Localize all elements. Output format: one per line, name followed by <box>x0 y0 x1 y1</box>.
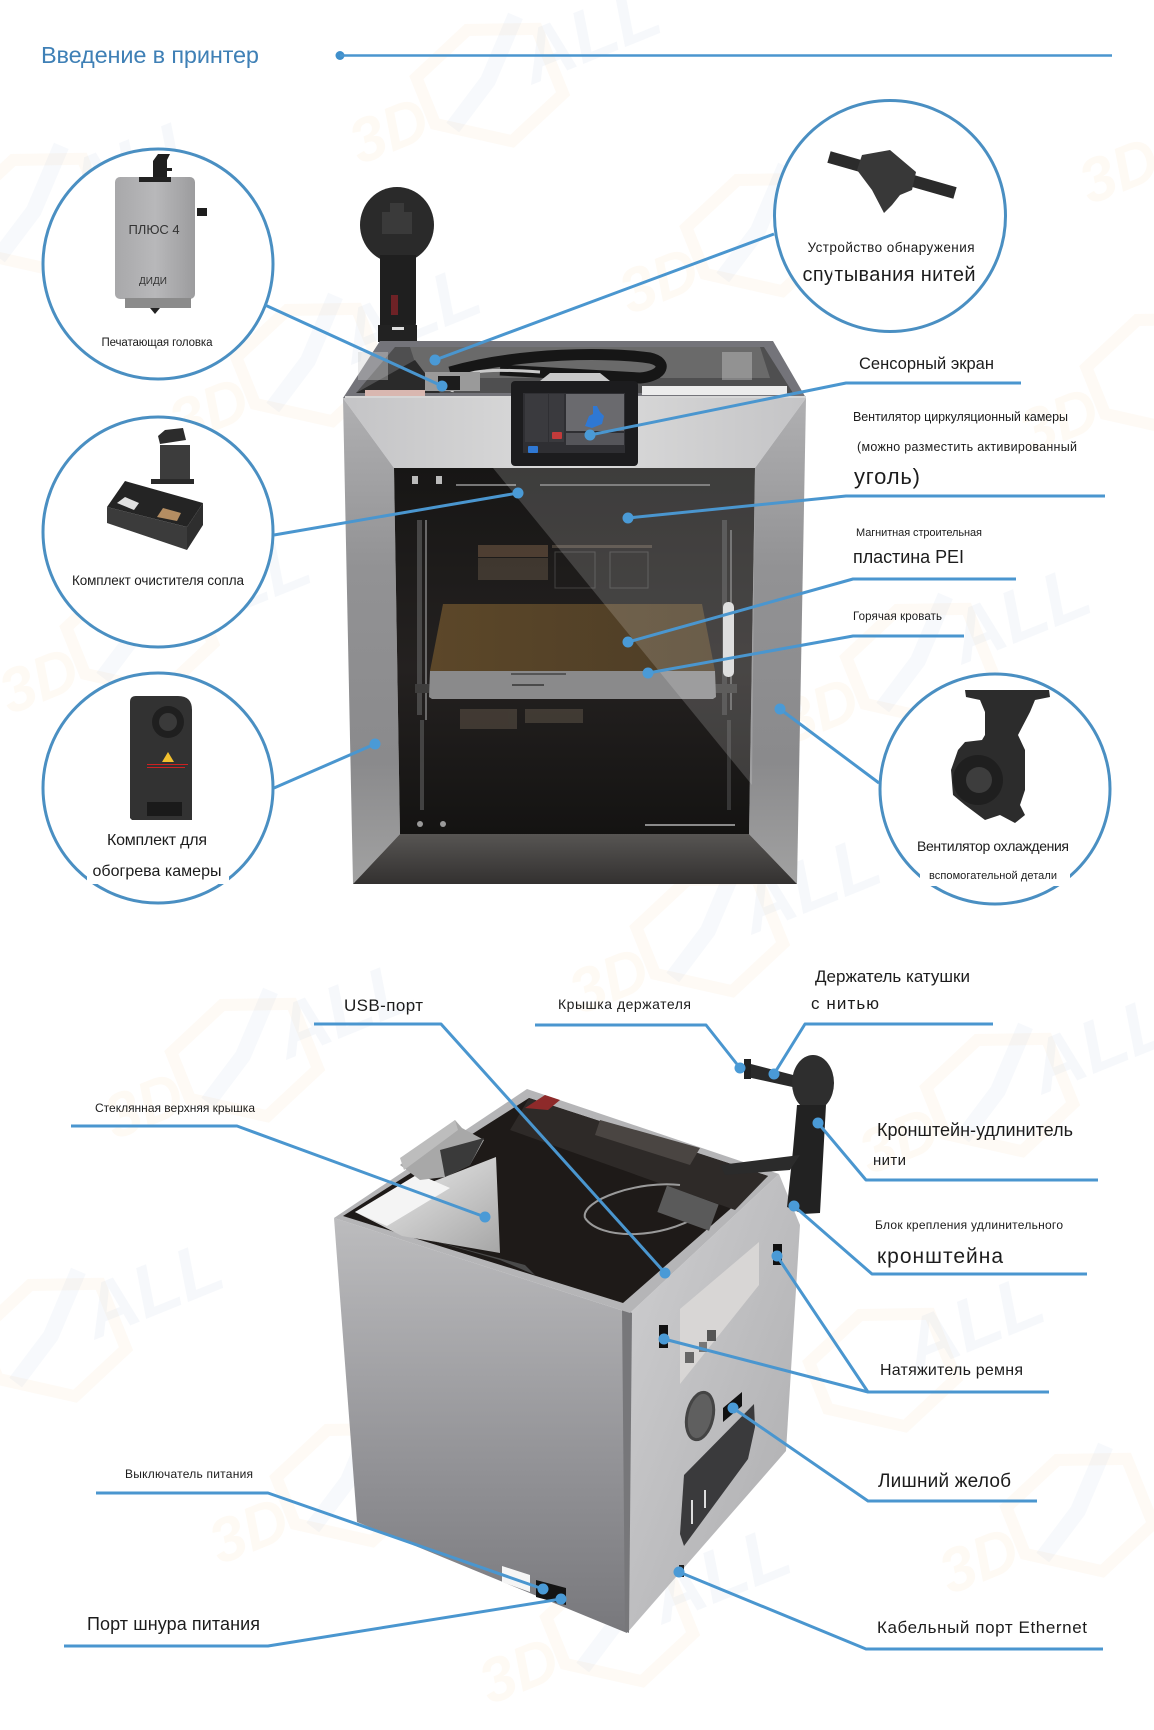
callout lines: front view <box>265 234 1105 788</box>
watermark background: ALL <box>51 99 218 230</box>
label: extra chute: Лишний желоб <box>878 1471 1011 1492</box>
labels: front view right column <box>853 355 1077 623</box>
callout lines: rear view <box>64 1024 1103 1649</box>
label: printhead: Печатающая головка <box>102 337 213 349</box>
icon: blower fan <box>951 690 1050 823</box>
label: spool holder: Держатель катушки <box>815 967 970 986</box>
watermark background: ALL <box>889 1257 1055 1389</box>
watermark background: ALL <box>68 1224 235 1355</box>
top opening <box>343 1095 768 1303</box>
label: blower fan: вспомогательной детали <box>929 870 1057 882</box>
label: chamber heater: Комплект для <box>107 832 207 849</box>
watermark background: 3D <box>849 1094 949 1188</box>
label: chamber heater: обогрева камеры <box>92 863 222 880</box>
label: circulation fan: уголь) <box>854 464 920 489</box>
circle: nozzle wiper kit <box>43 417 273 647</box>
icon: nozzle wiper <box>107 428 203 550</box>
label: bracket mount block: кронштейна <box>877 1245 1003 1268</box>
label: chamber heater <box>87 832 229 884</box>
label: spool holder <box>811 967 970 1013</box>
label: belt tensioner: Натяжитель ремня <box>880 1362 1023 1379</box>
printer top interior <box>343 341 806 398</box>
label: bracket mount block <box>875 1218 1063 1268</box>
label: tangle detector: Устройство обнаружения <box>808 240 974 255</box>
label: magnetic PEI plate: Магнитная строительная <box>856 527 982 539</box>
frame bevels <box>343 398 806 884</box>
icon: chamber heater <box>130 696 192 820</box>
label: filament extension bracket <box>873 1120 1073 1169</box>
label: holder cover: Крышка держателя <box>558 996 691 1012</box>
front corner edge <box>622 1308 632 1633</box>
watermark background: 3D <box>559 934 659 1028</box>
panel: front view printer <box>343 187 806 884</box>
label: magnetic PEI plate: пластина PEI <box>853 547 964 567</box>
labels: rear view <box>87 967 1087 1637</box>
icon: printhead: ПЛЮС 4 <box>128 222 180 237</box>
label: filament extension bracket: Кронштейн-удлинитель <box>877 1120 1073 1140</box>
chamber window <box>394 468 755 834</box>
heated bed <box>429 604 716 699</box>
watermark background: ALL <box>260 944 427 1075</box>
watermark background: 3D <box>1009 374 1109 468</box>
watermark background: 3D <box>609 234 709 328</box>
circle: auxiliary part cooling fan <box>880 674 1110 904</box>
icon: printhead <box>115 154 207 314</box>
label: blower fan <box>917 838 1070 886</box>
watermark background: 3D <box>199 1484 299 1578</box>
label: ethernet port: Кабельный порт Ethernet <box>877 1618 1087 1637</box>
rear spool holder <box>720 1055 834 1214</box>
panel: rear view printer <box>334 1055 834 1633</box>
label: bracket mount block: Блок крепления удлинительного <box>875 1218 1063 1232</box>
rear right face <box>627 1174 800 1633</box>
circle: chamber heater <box>43 673 273 903</box>
circle: printhead <box>43 149 273 379</box>
label: circulation fan: Вентилятор циркуляционный камеры <box>853 410 1068 424</box>
watermark background: 3D <box>769 664 869 758</box>
title rule <box>336 51 1112 60</box>
label: circulation fan <box>853 410 1077 489</box>
glass reflection <box>493 468 755 785</box>
label: blower fan: Вентилятор охлаждения <box>917 838 1069 854</box>
watermark background: 3D <box>159 364 259 458</box>
label: tangle detector: спутывания нитей <box>802 264 976 286</box>
watermark background: 3D <box>94 1059 194 1153</box>
watermark background: ALL <box>635 1509 802 1640</box>
watermark background: 3D <box>339 84 439 178</box>
label: nozzle wiper: Комплект очистителя сопла <box>72 573 244 588</box>
label: hot bed: Горячая кровать <box>853 611 942 623</box>
watermark background: ALL <box>725 819 892 950</box>
icon: printhead: ДИДИ <box>139 276 167 287</box>
watermark background: 3D <box>469 1624 569 1718</box>
watermark background: ALL <box>365 1369 532 1500</box>
label: circulation fan: (можно разместить активированный <box>857 440 1077 454</box>
spool holder arm <box>360 187 434 343</box>
top rim <box>334 1089 779 1313</box>
rear labels and details <box>502 1242 782 1605</box>
label: spool holder: с нитью <box>811 994 879 1013</box>
watermark background: ALL <box>775 119 942 250</box>
watermark background: ALL <box>935 549 1102 680</box>
label: tangle detector <box>802 240 976 286</box>
label: glass top cover: Стеклянная верхняя крышка <box>95 1101 255 1115</box>
touch screen <box>511 373 638 466</box>
label: power switch: Выключатель питания <box>125 1467 253 1481</box>
watermark background: ALL <box>155 519 322 650</box>
title: Введение в принтер <box>41 42 259 68</box>
label: USB port: USB-порт <box>344 996 423 1015</box>
label: touch screen: Сенсорный экран <box>859 355 994 373</box>
rear left face <box>334 1218 630 1633</box>
label: magnetic PEI plate <box>853 527 982 567</box>
watermark background: ALL <box>325 249 492 380</box>
circle: filament tangle detection <box>774 100 1006 332</box>
label: power cord port: Порт шнура питания <box>87 1614 260 1634</box>
icon: tangle detector <box>829 150 955 213</box>
watermark background: 3D <box>929 1514 1029 1608</box>
label: filament extension bracket: нити <box>873 1152 906 1169</box>
